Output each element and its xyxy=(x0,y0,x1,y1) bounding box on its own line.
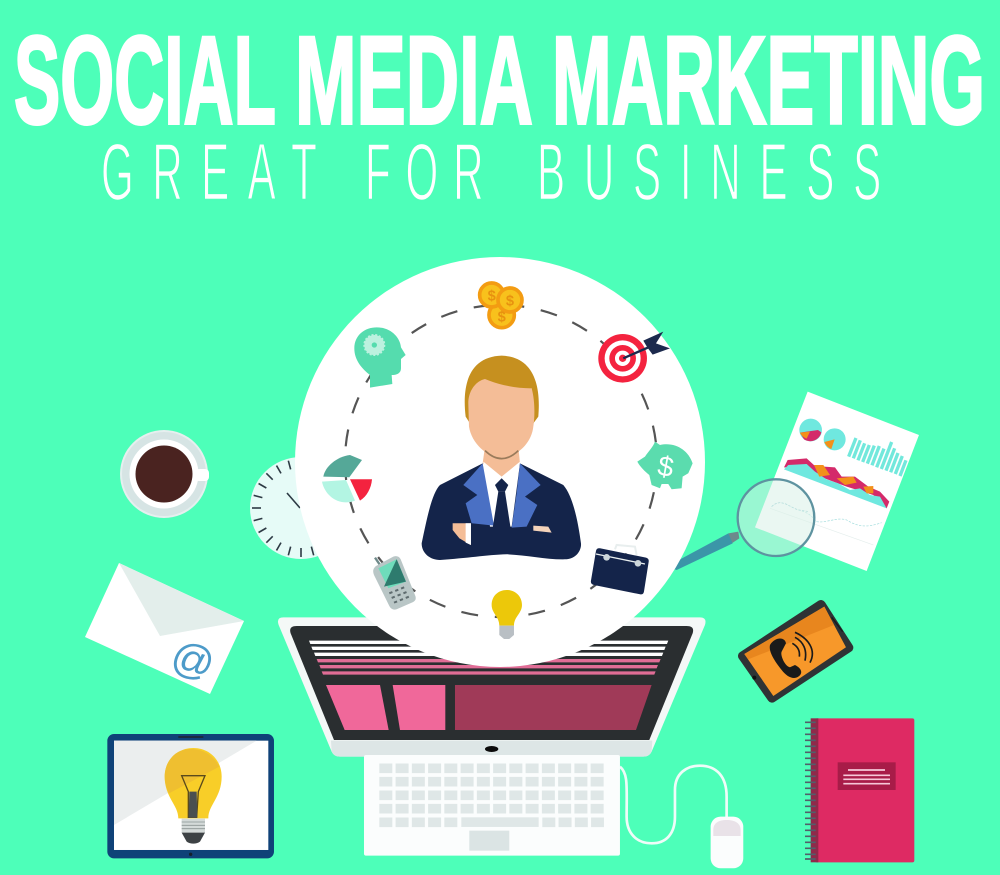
suit xyxy=(422,463,581,560)
icon: magnifying glass xyxy=(667,479,814,570)
icon: target with dart xyxy=(598,332,670,383)
title: MEDIA xyxy=(295,12,533,150)
icon: tablet with light bulb xyxy=(107,734,274,858)
shirt xyxy=(483,462,520,528)
icon: coins: $ xyxy=(488,289,496,305)
icon: envelope xyxy=(85,563,244,694)
face xyxy=(468,379,534,457)
area chart xyxy=(784,458,889,508)
title xyxy=(14,12,985,150)
dashed ring xyxy=(345,305,657,617)
title: SOCIAL xyxy=(14,12,276,150)
icon: mobile phone xyxy=(373,556,416,610)
icon: clock xyxy=(250,457,352,559)
subtitle: BUSINESS xyxy=(537,127,881,217)
line chart xyxy=(772,503,882,526)
icon: briefcase xyxy=(591,545,649,594)
icon: head with gear xyxy=(354,327,406,388)
lapels xyxy=(463,463,494,526)
laptop with mouse xyxy=(278,617,743,868)
icon: smartphone xyxy=(743,605,849,698)
icon group: circle contents xyxy=(322,283,693,639)
panel: central white circle xyxy=(295,257,705,667)
mouse cord xyxy=(620,766,727,843)
camera xyxy=(485,746,498,752)
icon: piggy bank xyxy=(637,442,693,489)
hands xyxy=(453,523,471,545)
subtitle: GREAT xyxy=(101,127,317,217)
icon: spiral notebook xyxy=(805,718,914,862)
person xyxy=(422,356,581,560)
screen stripes xyxy=(309,641,668,675)
bar chart xyxy=(849,438,906,476)
icon: pie chart xyxy=(322,455,372,502)
icon: coins xyxy=(480,283,522,328)
screen panels xyxy=(326,685,652,730)
icon: envelope: @ xyxy=(166,631,220,688)
icon: coffee cup xyxy=(120,430,209,518)
icon: coins: $ xyxy=(506,294,514,310)
pie charts xyxy=(799,419,846,450)
icon: coins: $ xyxy=(498,310,506,326)
neck xyxy=(483,447,520,478)
tie xyxy=(495,478,508,492)
icon: piggy bank: $ xyxy=(655,450,676,483)
hair xyxy=(465,356,539,423)
icon: report page xyxy=(755,392,919,571)
keyboard xyxy=(364,755,620,856)
mouse xyxy=(711,817,743,868)
screen frame xyxy=(278,617,706,757)
subtitle xyxy=(101,127,881,217)
subtitle: FOR xyxy=(365,127,484,217)
icon: light bulb xyxy=(492,590,522,639)
